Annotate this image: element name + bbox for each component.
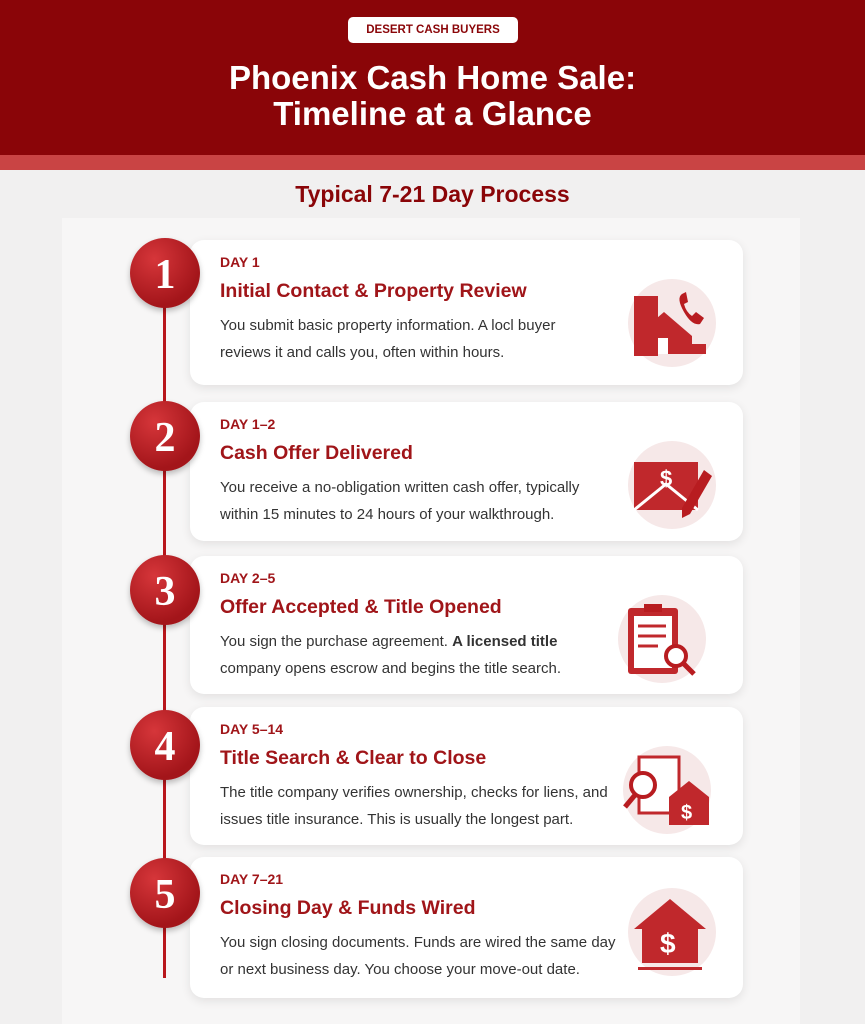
header xyxy=(0,0,865,155)
icon: house phone xyxy=(628,279,716,367)
card 1: Initial Contact & Property Review xyxy=(220,280,527,302)
step 2: 2 xyxy=(154,415,176,461)
card 4: DAY 5–14 xyxy=(220,721,283,737)
title: Phoenix Cash Home Sale: xyxy=(229,59,636,96)
timeline line xyxy=(163,275,166,978)
icon: house dollar xyxy=(628,888,716,976)
title: Timeline at a Glance xyxy=(273,95,592,132)
step 4 xyxy=(130,710,200,780)
badge: DESERT CASH BUYERS xyxy=(366,24,500,36)
card 2 xyxy=(190,402,743,541)
card 3: DAY 2–5 xyxy=(220,570,275,586)
icon: clipboard xyxy=(618,595,706,683)
icon: envelope xyxy=(628,441,716,529)
card 1 xyxy=(190,240,743,385)
step 2 xyxy=(130,401,200,471)
title xyxy=(229,59,636,132)
icon: house dollar: $ xyxy=(660,928,676,959)
card 3 xyxy=(190,556,743,694)
subtitle: Typical 7-21 Day Process xyxy=(295,181,570,207)
step 4: 4 xyxy=(154,724,176,770)
step 5 xyxy=(130,858,200,928)
step 1 xyxy=(130,238,200,308)
card 4: The title company verifies ownership, checks for liens, and issues title insurance. This is usually the longest part. xyxy=(220,784,608,828)
card 1: DAY 1 xyxy=(220,254,260,270)
icon: envelope: $ xyxy=(660,466,672,491)
card 1: You submit basic property information. A locl buyer reviews it and calls you, often within hours. xyxy=(220,317,555,361)
icon: search house: $ xyxy=(681,802,692,824)
card 3: Offer Accepted & Title Opened xyxy=(220,596,502,618)
panel xyxy=(62,218,800,1024)
icon: search house xyxy=(623,746,711,834)
step 3: 3 xyxy=(154,569,176,615)
card 4: Title Search & Clear to Close xyxy=(220,747,486,769)
card 2: DAY 1–2 xyxy=(220,416,275,432)
card 5 xyxy=(190,857,743,998)
card 5: You sign closing documents. Funds are wired the same day or next business day. You choose your move-out date. xyxy=(220,934,616,978)
card 2: Cash Offer Delivered xyxy=(220,442,413,464)
step 5: 5 xyxy=(154,872,176,918)
card 2: You receive a no-obligation written cash offer, typically within 15 minutes to 24 hours of your walkthrough. xyxy=(220,479,579,523)
card 5: Closing Day & Funds Wired xyxy=(220,897,476,919)
step 1: 1 xyxy=(154,252,176,298)
card 3: You sign the purchase agreement. A licensed title company opens escrow and begins the title search. xyxy=(220,633,561,677)
step 3 xyxy=(130,555,200,625)
card 4 xyxy=(190,707,743,845)
badge xyxy=(348,17,518,43)
card 5: DAY 7–21 xyxy=(220,871,283,887)
